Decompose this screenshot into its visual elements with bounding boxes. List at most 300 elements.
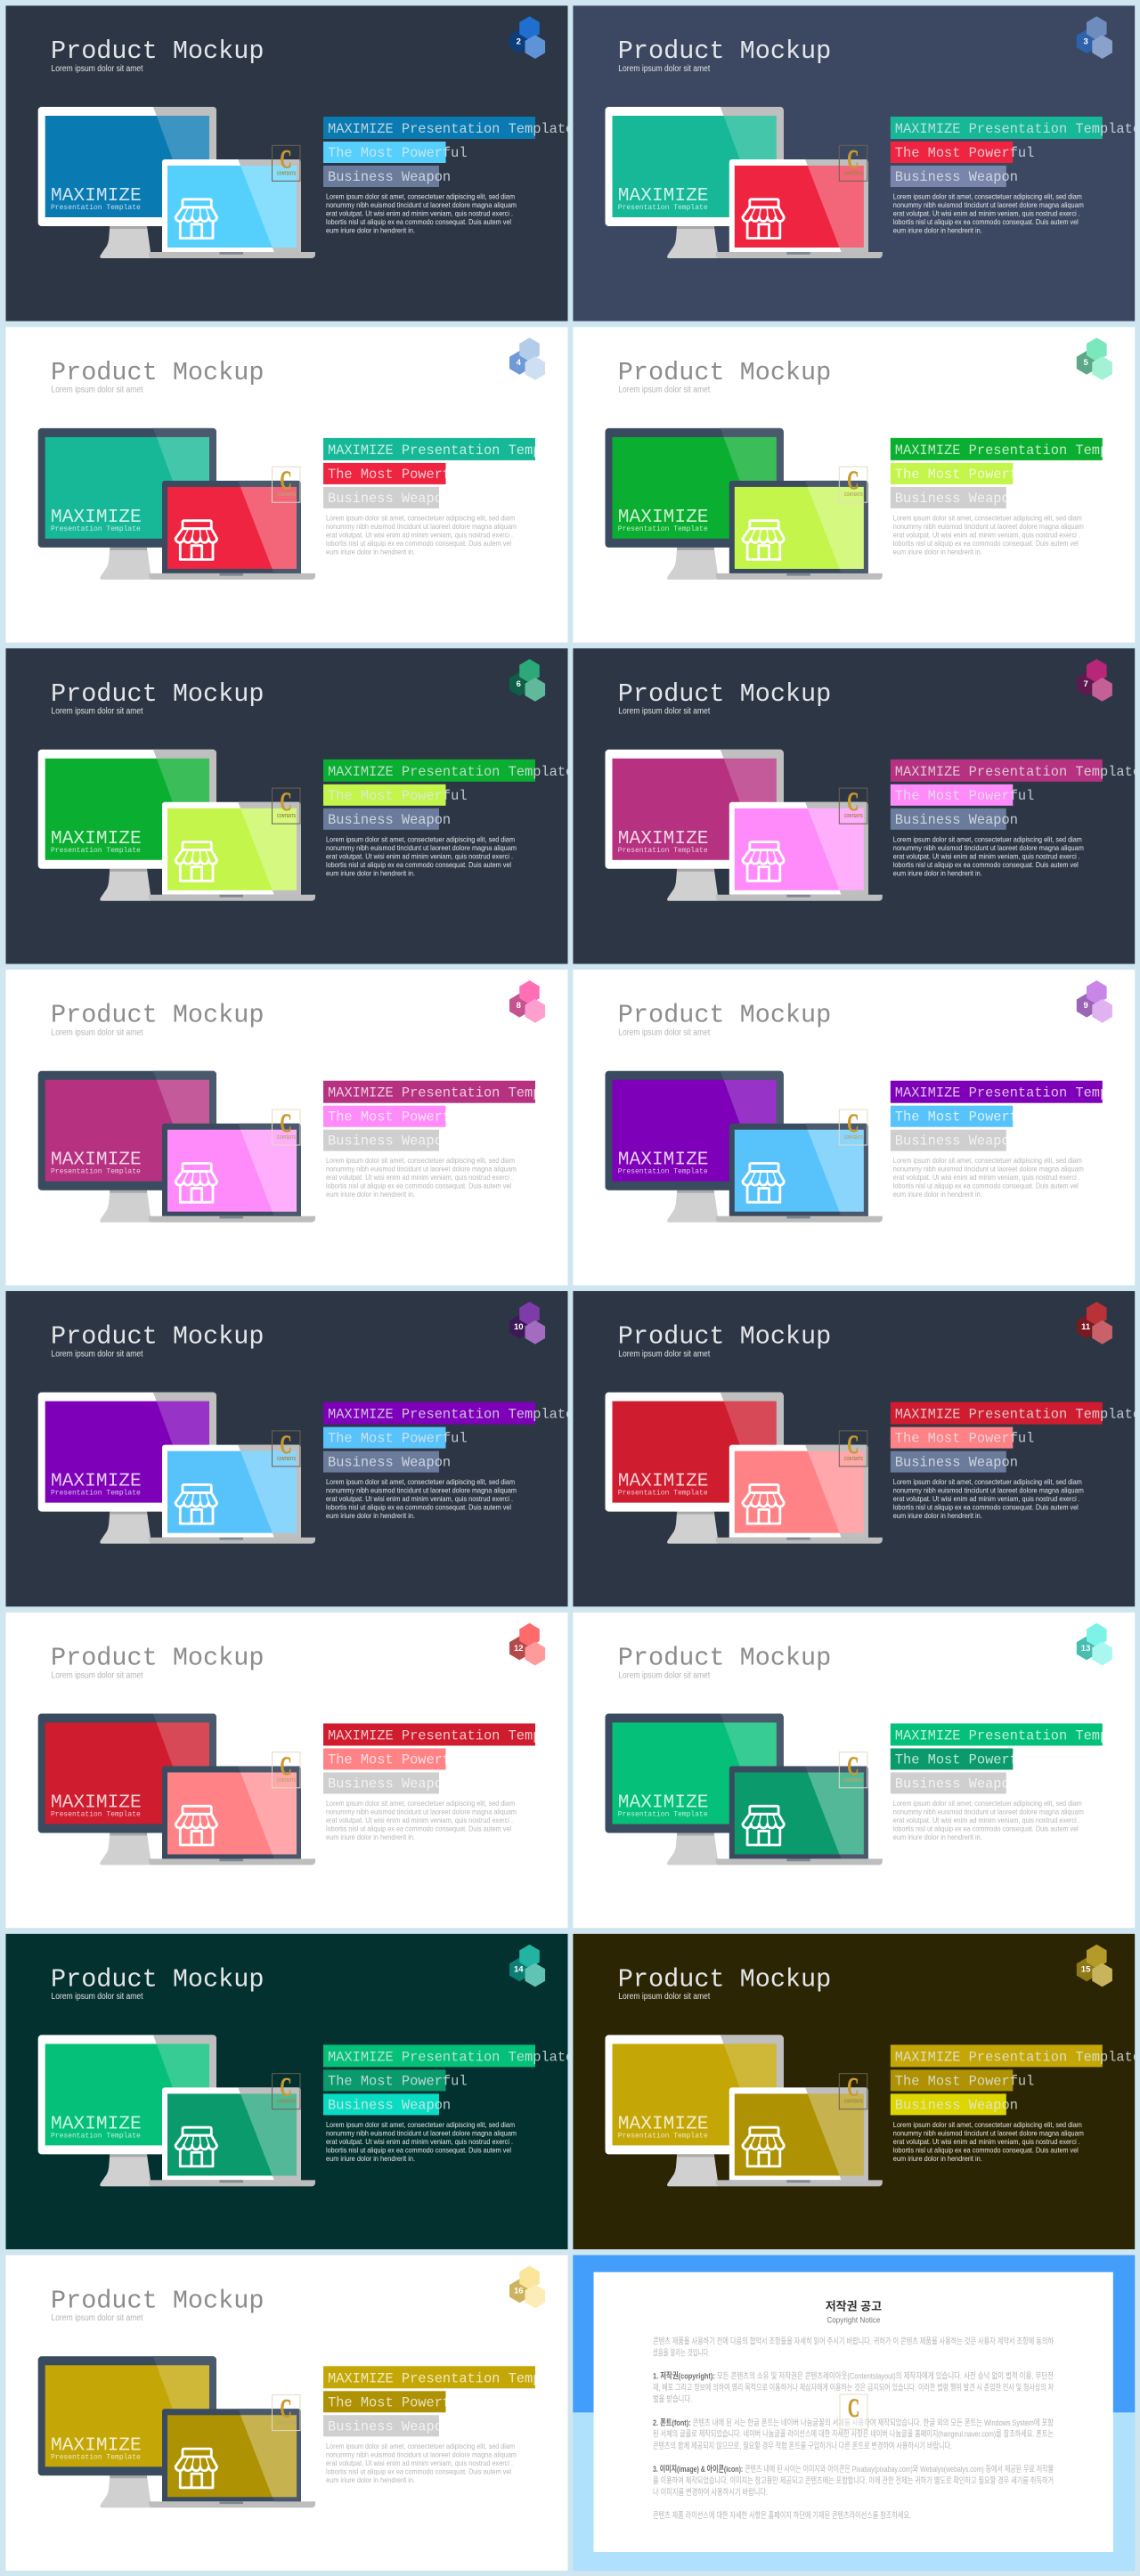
title: Product Mockup [618, 679, 831, 709]
monitor mockup [606, 2035, 784, 2186]
monitor mockup [38, 2356, 216, 2507]
watermark: C [847, 1751, 859, 1781]
body text: nonummy nibh euismod tincidunt ut laoreet dolore magna aliquam [326, 200, 517, 209]
body text [326, 1477, 517, 1520]
monitor mockup: Presentation Template [51, 1490, 141, 1498]
monitor mockup: Presentation Template [618, 1490, 708, 1498]
body text: nonummy nibh euismod tincidunt ut laoreet dolore magna aliquam [893, 522, 1084, 531]
notice section 2 [653, 2418, 1054, 2450]
notice card [593, 2272, 1113, 2552]
icon: hexagon page badge [509, 337, 545, 380]
icon: hexagon page badge: 10 [514, 1322, 524, 1332]
body text: Lorem ipsum dolor sit amet, consectetuer adipiscing elit, sed diam [326, 2442, 515, 2450]
body text: Lorem ipsum dolor sit amet, consectetuer adipiscing elit, sed diam [893, 834, 1082, 843]
icon: hexagon page badge [1077, 16, 1112, 59]
body text: erat volutpat. Ut wisi enim ad minim veniam, quis nostrud exerci . [326, 2458, 513, 2467]
monitor mockup [38, 107, 216, 258]
monitor mockup [606, 750, 784, 901]
watermark [839, 466, 867, 502]
icon: hexagon page badge: 7 [1083, 679, 1088, 689]
monitor mockup [606, 1071, 784, 1223]
body text: nonummy nibh euismod tincidunt ut laoreet dolore magna aliquam [893, 1486, 1084, 1495]
body text [893, 834, 1084, 877]
headline bars [891, 1081, 1140, 1151]
monitor mockup: MAXIMIZE [618, 507, 709, 528]
subtitle: Lorem ipsum dolor sit amet [618, 1349, 710, 1359]
headline bars: Business Weapon [895, 812, 1018, 828]
icon: hexagon page badge: 8 [517, 1001, 521, 1011]
body text: eum iriure dolor in hendrerit in. [893, 2154, 982, 2163]
title: Product Mockup [51, 1322, 264, 1352]
title: Product Mockup [51, 1644, 264, 1673]
panel: slide 15 gold on dark olive [573, 1934, 1140, 2249]
laptop mockup with store icon [149, 2409, 315, 2507]
monitor mockup: Presentation Template [618, 2132, 708, 2140]
monitor mockup [606, 107, 784, 258]
headline bars: The Most Powerful [895, 2073, 1034, 2089]
watermark: C [848, 2393, 859, 2423]
headline bars: MAXIMIZE Presentation Template [328, 764, 574, 780]
watermark: CONTENTS [277, 2100, 297, 2105]
panel: slide 12 red and salmon on white [5, 1613, 574, 1928]
body text [326, 2120, 517, 2163]
monitor mockup [38, 1393, 216, 1544]
panel: slide 3 teal and red on navy [573, 5, 1140, 321]
panel: copyright notice [573, 2255, 1135, 2571]
monitor mockup: Presentation Template [51, 1811, 141, 1819]
monitor mockup: Presentation Template [51, 204, 141, 212]
headline bars: Business Weapon [328, 2097, 451, 2113]
body text: erat volutpat. Ut wisi enim ad minim veniam, quis nostrud exerci . [326, 1816, 513, 1824]
body text: nonummy nibh euismod tincidunt ut laoreet dolore magna aliquam [326, 843, 517, 852]
headline bars: The Most Powerful [895, 1109, 1034, 1125]
headline bars [323, 2366, 574, 2436]
body text [326, 1156, 517, 1199]
laptop mockup with store icon [149, 1124, 315, 1223]
monitor mockup: Presentation Template [618, 525, 708, 533]
headline bars: Business Weapon [895, 491, 1018, 507]
headline bars: MAXIMIZE Presentation Template [895, 121, 1140, 137]
monitor mockup: MAXIMIZE [51, 1150, 142, 1171]
body text: eum iriure dolor in hendrerit in. [326, 1190, 415, 1199]
icon: hexagon page badge: 12 [514, 1644, 524, 1654]
notice subheading: Copyright Notice [826, 2315, 880, 2326]
watermark: CONTENTS [844, 1457, 863, 1462]
headline bars: The Most Powerful [895, 1752, 1034, 1768]
body text: nonummy nibh euismod tincidunt ut laoreet dolore magna aliquam [326, 2450, 517, 2458]
headline bars: Business Weapon [328, 1776, 451, 1792]
monitor mockup [38, 2035, 216, 2186]
body text [893, 1156, 1084, 1199]
body text: nonummy nibh euismod tincidunt ut laoreet dolore magna aliquam [326, 2128, 517, 2137]
title: Product Mockup [618, 358, 831, 387]
headline bars [891, 438, 1140, 508]
monitor mockup: Presentation Template [51, 847, 141, 855]
watermark: CONTENTS [277, 1778, 297, 1784]
headline bars: MAXIMIZE Presentation Template [328, 1085, 574, 1101]
monitor mockup [606, 1713, 784, 1865]
watermark [273, 1430, 300, 1467]
body text: eum iriure dolor in hendrerit in. [326, 225, 415, 235]
icon: hexagon page badge [509, 2266, 545, 2308]
headline bars [323, 2044, 574, 2115]
subtitle: Lorem ipsum dolor sit amet [52, 1992, 143, 2002]
laptop mockup with store icon [149, 802, 315, 901]
watermark: C [847, 1430, 859, 1459]
body text: lobortis nisl ut aliquip ex ea commodo consequat. Duis autem vel [326, 217, 511, 226]
body text: Lorem ipsum dolor sit amet, consectetuer adipiscing elit, sed diam [893, 1156, 1082, 1165]
headline bars [323, 117, 574, 187]
monitor mockup [38, 1713, 216, 1865]
subtitle: Lorem ipsum dolor sit amet [52, 1670, 143, 1680]
subtitle: Lorem ipsum dolor sit amet [52, 1349, 143, 1359]
monitor mockup: Presentation Template [51, 1168, 141, 1176]
watermark: CONTENTS [277, 1135, 297, 1141]
headline bars: MAXIMIZE Presentation Template [895, 2049, 1140, 2065]
headline bars: Business Weapon [895, 1134, 1018, 1150]
headline bars [323, 1402, 574, 1473]
watermark [839, 1109, 867, 1145]
headline bars [891, 2044, 1140, 2115]
watermark [273, 2394, 300, 2431]
headline bars: MAXIMIZE Presentation Template [895, 1407, 1140, 1423]
monitor mockup [38, 1071, 216, 1223]
body text: Lorem ipsum dolor sit amet, consectetuer adipiscing elit, sed diam [893, 2120, 1082, 2129]
icon: hexagon page badge [509, 659, 545, 702]
watermark [839, 2073, 867, 2109]
watermark [839, 1430, 867, 1467]
body text [326, 513, 517, 556]
watermark: C [280, 466, 292, 495]
subtitle: Lorem ipsum dolor sit amet [618, 1028, 710, 1038]
watermark: CONTENTS [844, 2100, 863, 2105]
headline bars: The Most Powerful [895, 145, 1034, 161]
body text: Lorem ipsum dolor sit amet, consectetuer adipiscing elit, sed diam [893, 513, 1082, 522]
watermark [273, 1109, 300, 1145]
watermark: C [280, 2394, 292, 2424]
body text: lobortis nisl ut aliquip ex ea commodo consequat. Duis autem vel [326, 2466, 511, 2475]
monitor mockup: Presentation Template [618, 847, 708, 855]
body text: Lorem ipsum dolor sit amet, consectetuer adipiscing elit, sed diam [893, 1477, 1082, 1486]
watermark: CONTENTS [844, 1778, 863, 1784]
body text: Lorem ipsum dolor sit amet, consectetuer adipiscing elit, sed diam [893, 191, 1082, 200]
body text: erat volutpat. Ut wisi enim ad minim veniam, quis nostrud exerci . [326, 208, 513, 217]
watermark: C [280, 1109, 292, 1138]
body text: erat volutpat. Ut wisi enim ad minim veniam, quis nostrud exerci . [893, 1173, 1080, 1182]
body text: eum iriure dolor in hendrerit in. [326, 547, 415, 556]
monitor mockup: MAXIMIZE [51, 2434, 142, 2456]
notice intro: 셨음을 알리는 것입니다. [653, 2347, 710, 2358]
watermark: C [847, 787, 859, 817]
body text: Lorem ipsum dolor sit amet, consectetuer adipiscing elit, sed diam [326, 2120, 515, 2129]
panel: slide 11 red and salmon on dark [573, 1291, 1140, 1606]
subtitle: Lorem ipsum dolor sit amet [52, 2313, 143, 2323]
icon: hexagon page badge [509, 1623, 545, 1665]
headline bars: The Most Powerful [328, 2394, 468, 2410]
headline bars: Business Weapon [895, 169, 1018, 185]
headline bars [891, 117, 1140, 187]
body text: eum iriure dolor in hendrerit in. [326, 1832, 415, 1841]
laptop mockup with store icon [716, 2087, 883, 2186]
icon: hexagon page badge: 15 [1081, 1965, 1091, 1975]
panel: slide 6 green and lime on dark [5, 648, 574, 964]
headline bars: Business Weapon [895, 2097, 1018, 2113]
headline bars: MAXIMIZE Presentation Template [328, 121, 574, 137]
subtitle: Lorem ipsum dolor sit amet [618, 1992, 710, 2002]
body text [326, 2442, 517, 2484]
monitor mockup: Presentation Template [618, 1811, 708, 1819]
icon: hexagon page badge: 14 [514, 1965, 524, 1975]
monitor mockup: MAXIMIZE [618, 185, 709, 207]
monitor mockup: Presentation Template [618, 204, 708, 212]
notice heading: 저작권 공고 [826, 2299, 882, 2313]
headline bars: Business Weapon [328, 812, 451, 828]
title: Product Mockup [51, 1964, 264, 1994]
icon: hexagon page badge [1077, 980, 1112, 1023]
laptop mockup with store icon [716, 1445, 883, 1544]
headline bars: The Most Powerful [895, 788, 1034, 804]
icon: hexagon page badge: 13 [1081, 1644, 1090, 1654]
watermark [273, 787, 300, 824]
title: Product Mockup [51, 358, 264, 387]
monitor mockup [606, 428, 784, 580]
monitor mockup [606, 1393, 784, 1544]
headline bars [323, 1724, 574, 1793]
body text: Lorem ipsum dolor sit amet, consectetuer adipiscing elit, sed diam [326, 1477, 515, 1486]
monitor mockup: Presentation Template [51, 2132, 141, 2140]
headline bars [891, 760, 1140, 830]
laptop mockup with store icon [716, 1767, 883, 1865]
body text: eum iriure dolor in hendrerit in. [326, 1511, 415, 1520]
headline bars: MAXIMIZE Presentation Template [328, 2370, 574, 2386]
subtitle: Lorem ipsum dolor sit amet [618, 1670, 710, 1680]
title: Product Mockup [51, 2286, 264, 2315]
icon: hexagon page badge [509, 16, 545, 59]
subtitle: Lorem ipsum dolor sit amet [52, 1028, 143, 1038]
headline bars: Business Weapon [328, 491, 451, 507]
watermark: C [280, 1751, 292, 1781]
body text: lobortis nisl ut aliquip ex ea commodo consequat. Duis autem vel [326, 1824, 511, 1833]
watermark [273, 144, 300, 181]
body text: nonummy nibh euismod tincidunt ut laoreet dolore magna aliquam [893, 1808, 1084, 1816]
title: Product Mockup [51, 37, 264, 66]
body text: lobortis nisl ut aliquip ex ea commodo consequat. Duis autem vel [893, 1824, 1079, 1833]
icon: hexagon page badge: 5 [1083, 358, 1088, 368]
headline bars: MAXIMIZE Presentation Template [328, 2049, 574, 2065]
icon: hexagon page badge [1077, 337, 1112, 380]
headline bars: The Most Powerful [328, 2073, 468, 2089]
notice section 1: 벌을 받습니다. [653, 2393, 692, 2404]
subtitle: Lorem ipsum dolor sit amet [52, 386, 143, 395]
panel: slide 16 gold on white [5, 2255, 574, 2571]
watermark: CONTENTS [277, 1457, 297, 1462]
headline bars: MAXIMIZE Presentation Template [328, 1728, 574, 1744]
body text: eum iriure dolor in hendrerit in. [893, 1832, 982, 1841]
watermark [839, 144, 867, 181]
body text: lobortis nisl ut aliquip ex ea commodo consequat. Duis autem vel [326, 1182, 511, 1190]
monitor mockup: Presentation Template [618, 1168, 708, 1176]
monitor mockup: Presentation Template [51, 2453, 141, 2461]
monitor mockup: MAXIMIZE [51, 828, 142, 849]
body text: lobortis nisl ut aliquip ex ea commodo consequat. Duis autem vel [893, 539, 1079, 548]
body text: erat volutpat. Ut wisi enim ad minim veniam, quis nostrud exerci . [893, 1816, 1080, 1824]
body text [893, 2120, 1084, 2163]
body text: erat volutpat. Ut wisi enim ad minim veniam, quis nostrud exerci . [326, 1173, 513, 1182]
subtitle: Lorem ipsum dolor sit amet [618, 64, 710, 74]
body text: erat volutpat. Ut wisi enim ad minim veniam, quis nostrud exerci . [893, 1494, 1080, 1503]
notice section 1 [653, 2370, 1054, 2404]
body text: lobortis nisl ut aliquip ex ea commodo consequat. Duis autem vel [326, 2145, 511, 2154]
headline bars: The Most Powerful [328, 1109, 468, 1125]
headline bars: MAXIMIZE Presentation Template [895, 443, 1140, 459]
monitor mockup [38, 750, 216, 901]
headline bars: MAXIMIZE Presentation Template [895, 1085, 1140, 1101]
headline bars [891, 1724, 1140, 1793]
icon: hexagon page badge: 16 [514, 2287, 524, 2296]
body text: nonummy nibh euismod tincidunt ut laoreet dolore magna aliquam [893, 843, 1084, 852]
body text: Lorem ipsum dolor sit amet, consectetuer adipiscing elit, sed diam [326, 1156, 515, 1165]
monitor mockup: MAXIMIZE [618, 1150, 709, 1171]
title: Product Mockup [618, 1644, 831, 1673]
headline bars: The Most Powerful [328, 1752, 468, 1768]
subtitle: Lorem ipsum dolor sit amet [618, 707, 710, 717]
watermark: C [280, 144, 292, 174]
body text [326, 834, 517, 877]
headline bars: The Most Powerful [328, 145, 468, 161]
body text: nonummy nibh euismod tincidunt ut laoreet dolore magna aliquam [326, 522, 517, 531]
watermark [839, 1751, 867, 1788]
title: Product Mockup [51, 679, 264, 709]
icon: hexagon page badge [509, 980, 545, 1023]
body text [893, 1477, 1084, 1520]
monitor mockup: MAXIMIZE [618, 1471, 709, 1492]
body text: eum iriure dolor in hendrerit in. [326, 2154, 415, 2163]
panel: slide 8 magenta and pink on white [5, 970, 574, 1286]
headline bars: Business Weapon [328, 2418, 451, 2434]
headline bars [323, 438, 535, 508]
laptop mockup with store icon [149, 1767, 315, 1865]
monitor mockup: MAXIMIZE [51, 2113, 142, 2134]
headline bars: The Most Powerful [328, 1431, 468, 1447]
monitor mockup: Presentation Template [51, 525, 141, 533]
body text: Lorem ipsum dolor sit amet, consectetuer adipiscing elit, sed diam [326, 513, 515, 522]
icon: hexagon page badge: 11 [1081, 1322, 1091, 1332]
icon: hexagon page badge: 9 [1083, 1001, 1088, 1011]
watermark: CONTENTS [277, 492, 297, 498]
icon: hexagon page badge: 3 [1083, 37, 1088, 46]
watermark: CONTENTS [844, 814, 863, 819]
headline bars: MAXIMIZE Presentation Template [328, 1407, 574, 1423]
headline bars: Business Weapon [895, 1455, 1018, 1471]
panel: slide 2 blue on dark [5, 5, 574, 321]
monitor mockup: MAXIMIZE [618, 828, 709, 849]
body text [893, 192, 1084, 235]
title: Product Mockup [618, 1964, 831, 1994]
body text [326, 192, 517, 235]
body text: nonummy nibh euismod tincidunt ut laoreet dolore magna aliquam [326, 1165, 517, 1174]
monitor mockup: MAXIMIZE [618, 2113, 709, 2134]
headline bars: Business Weapon [328, 1455, 451, 1471]
monitor mockup: MAXIMIZE [618, 1792, 709, 1814]
watermark [273, 2073, 300, 2109]
body text: nonummy nibh euismod tincidunt ut laoreet dolore magna aliquam [326, 1486, 517, 1495]
body text: nonummy nibh euismod tincidunt ut laoreet dolore magna aliquam [326, 1808, 517, 1816]
body text: nonummy nibh euismod tincidunt ut laoreet dolore magna aliquam [893, 200, 1084, 209]
monitor mockup [38, 428, 216, 580]
panel: slide 7 magenta and pink on dark [573, 648, 1140, 964]
body text: eum iriure dolor in hendrerit in. [326, 2475, 415, 2484]
body text [893, 1799, 1084, 1841]
laptop mockup with store icon [149, 159, 315, 258]
body text: eum iriure dolor in hendrerit in. [893, 868, 982, 877]
icon: hexagon page badge [509, 1945, 545, 1987]
watermark: C [847, 466, 859, 495]
icon: hexagon page badge [1077, 1302, 1112, 1345]
panel: slide 4 teal and red on white [5, 327, 574, 643]
laptop mockup with store icon [716, 802, 883, 901]
watermark: CONTENTS [844, 171, 863, 176]
body text: erat volutpat. Ut wisi enim ad minim veniam, quis nostrud exerci . [326, 1494, 513, 1503]
watermark: CONTENTS [277, 814, 297, 819]
headline bars: MAXIMIZE Presentation Template [895, 764, 1140, 780]
body text: eum iriure dolor in hendrerit in. [893, 547, 982, 556]
headline bars: The Most Powerful [328, 788, 468, 804]
watermark: CONTENTS [844, 492, 863, 498]
laptop mockup with store icon [716, 159, 883, 258]
body text: eum iriure dolor in hendrerit in. [893, 225, 982, 235]
body text: Lorem ipsum dolor sit amet, consectetuer adipiscing elit, sed diam [326, 1799, 515, 1808]
body text: Lorem ipsum dolor sit amet, consectetuer adipiscing elit, sed diam [893, 1799, 1082, 1808]
panel: slide 10 purple and sky on dark [5, 1291, 574, 1606]
icon: hexagon page badge: 6 [517, 679, 521, 689]
headline bars: MAXIMIZE Presentation Template [895, 1728, 1140, 1744]
watermark: C [847, 144, 859, 174]
watermark [839, 787, 867, 824]
panel: slide 9 purple and sky on white [573, 970, 1140, 1286]
watermark [273, 1751, 300, 1788]
watermark: C [280, 2073, 292, 2102]
body text: eum iriure dolor in hendrerit in. [893, 1511, 982, 1520]
headline bars: Business Weapon [328, 1134, 451, 1150]
title: Product Mockup [618, 1001, 831, 1030]
laptop mockup with store icon [149, 1445, 315, 1544]
body text: lobortis nisl ut aliquip ex ea commodo consequat. Duis autem vel [326, 860, 511, 869]
headline bars [891, 1402, 1140, 1473]
title: Product Mockup [618, 1322, 831, 1352]
body text: lobortis nisl ut aliquip ex ea commodo consequat. Duis autem vel [326, 539, 511, 548]
body text: nonummy nibh euismod tincidunt ut laoreet dolore magna aliquam [893, 1165, 1084, 1174]
subtitle: Lorem ipsum dolor sit amet [52, 64, 143, 74]
body text: lobortis nisl ut aliquip ex ea commodo consequat. Duis autem vel [893, 217, 1079, 226]
body text: erat volutpat. Ut wisi enim ad minim veniam, quis nostrud exerci . [326, 2137, 513, 2146]
notice section 1: 1. 저작권(copyright): 모든 콘텐츠의 소유 및 저작권은 콘텐츠레이아웃(Contentslayout)의 제작자에게 있습니다. 사전 승낙 없이 법적 이용, 무단전 [653, 2370, 1054, 2381]
icon: hexagon page badge [1077, 1945, 1112, 1987]
icon: hexagon page badge [509, 1302, 545, 1345]
body text [326, 1799, 517, 1841]
watermark [273, 466, 300, 502]
icon: hexagon page badge: 4 [517, 358, 522, 368]
body text: lobortis nisl ut aliquip ex ea commodo consequat. Duis autem vel [893, 1182, 1079, 1190]
watermark: CONTENTS [277, 2421, 297, 2426]
body text: eum iriure dolor in hendrerit in. [326, 868, 415, 877]
title: Product Mockup [618, 37, 831, 66]
body text: lobortis nisl ut aliquip ex ea commodo consequat. Duis autem vel [893, 860, 1079, 869]
panel: slide 13 emerald on white [573, 1613, 1140, 1928]
laptop mockup with store icon [149, 2087, 315, 2186]
monitor mockup: MAXIMIZE [51, 1792, 142, 1814]
laptop mockup with store icon [716, 481, 883, 580]
body text: erat volutpat. Ut wisi enim ad minim veniam, quis nostrud exerci . [326, 851, 513, 860]
